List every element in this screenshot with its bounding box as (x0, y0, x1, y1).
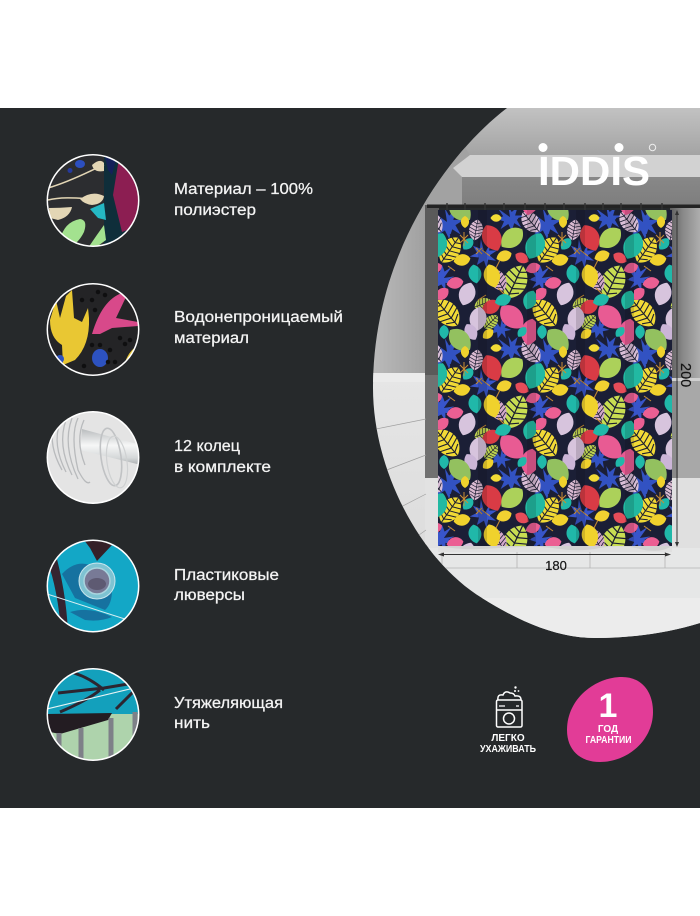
bathroom photo (370, 108, 700, 643)
tile wall left (373, 375, 426, 544)
feature icon 1: material (48, 157, 138, 246)
dimension: height (675, 210, 693, 547)
icon border 5 (47, 669, 139, 760)
easy care label (480, 733, 536, 755)
easy care label: УХАЖИВАТЬ (480, 744, 536, 755)
tile wall right (672, 478, 700, 548)
feature icon 4: grommet (48, 541, 138, 631)
easy care label: ЛЕГКО (491, 733, 525, 744)
feature text 3: 12 колец (174, 438, 240, 455)
icon border 4 (47, 540, 139, 632)
dimension: width (438, 552, 671, 573)
curtain shadow on floor (438, 546, 672, 551)
left wall return (424, 148, 466, 205)
feature text 2: материал (174, 330, 249, 347)
feature text 2 (174, 309, 343, 347)
feature text 1: Материал – 100% (174, 181, 313, 198)
warranty badge: ГАРАНТИИ (586, 735, 632, 746)
feature icon 2: waterproof (50, 290, 138, 368)
dimension: height: 200 (677, 363, 693, 387)
dimension: width: 180 (545, 558, 567, 573)
rod with hooks (427, 203, 700, 210)
warranty badge: 1 (599, 687, 617, 725)
infographic canvas (0, 108, 700, 808)
feature text 4: люверсы (174, 587, 245, 604)
icon border 1 (47, 155, 139, 246)
warranty badge: ГОД (598, 724, 618, 735)
logo: IDDIS (538, 148, 650, 194)
icon: washing machine (496, 686, 522, 727)
icon border 2 (47, 284, 139, 375)
hem (438, 546, 672, 552)
feature icon 3: rings (48, 412, 138, 502)
feature text 5 (174, 695, 283, 732)
feature text 3 (174, 438, 271, 476)
feature text 5: Утяжеляющая (174, 695, 283, 712)
feature text 2: Водонепроницаемый (174, 309, 343, 326)
floor (428, 548, 700, 638)
feature text 5: нить (174, 715, 210, 732)
feature text 4 (174, 567, 279, 604)
warranty badge (567, 677, 653, 762)
curtain (438, 210, 672, 552)
feature text 1 (174, 181, 313, 219)
feature text 3: в комплекте (174, 459, 271, 476)
icon border 3 (47, 412, 139, 503)
feature icon 5: weighted thread (48, 670, 138, 760)
dark panel (0, 108, 700, 808)
feature text 4: Пластиковые (174, 567, 279, 584)
feature text 1: полиэстер (174, 202, 256, 219)
crown moulding (453, 155, 700, 177)
